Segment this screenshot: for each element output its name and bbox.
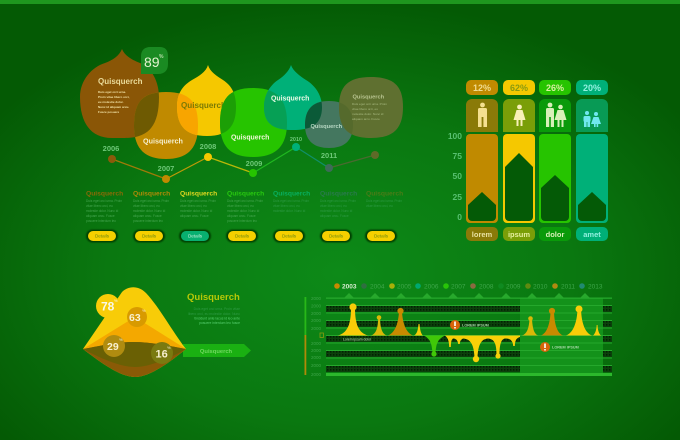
y axis labels: 2000 — [311, 311, 322, 316]
value 78: % — [114, 298, 118, 303]
y axis labels: 2000 — [311, 296, 322, 301]
axis labels: 0 — [457, 212, 462, 222]
column 7: Duis eget orci urna. Proin — [366, 199, 402, 203]
panel: drip timeline — [304, 283, 612, 377]
badge: 89 percent: % — [159, 54, 164, 60]
panel: timeline bubbles — [80, 47, 403, 159]
arrow label — [183, 344, 251, 357]
column 4: Quisquerch — [227, 190, 264, 198]
bubble: 2012: vitae libero orci, eu — [352, 107, 378, 111]
column 2 — [133, 190, 170, 223]
column: ipsum: ipsum — [508, 230, 530, 239]
column 2: Duis eget orci urna. Proin — [133, 199, 169, 203]
bubble: 2012: molestie dolor. Nunc id — [352, 112, 384, 116]
bubble: 2006: Duis eget orci urna. — [98, 90, 126, 94]
value 29 — [103, 335, 125, 357]
value 29: 29 — [107, 341, 119, 353]
column: lorem: lorem — [472, 230, 493, 239]
column 4: Duis eget orci urna. Proin — [227, 199, 263, 203]
buttons: Details — [235, 234, 250, 239]
line chart: years: 2009 — [246, 159, 262, 168]
bubble: 2010 — [264, 65, 322, 130]
legend: 2003 — [342, 284, 357, 290]
bubble: 2012: Quisquerch — [352, 94, 385, 100]
column 5 — [273, 190, 310, 213]
mountain shape — [83, 287, 186, 377]
column: ipsum — [503, 80, 535, 241]
column 1: Quisquerch — [86, 190, 123, 198]
y axis labels: 2000 — [311, 355, 322, 360]
column 2: Quisquerch — [133, 190, 170, 198]
line chart: years: 2011 — [321, 151, 337, 160]
bubble: 2012: Duis eget orci urna. Proin — [352, 102, 387, 106]
legend: 2011 — [561, 284, 575, 290]
column 2: aliquam arcu. Fusce — [133, 214, 162, 218]
column 1: posuere interdum leo — [86, 219, 116, 223]
column 1: Duis eget orci urna. Proin — [86, 199, 122, 203]
downward drips — [424, 336, 520, 362]
column: amet: 20% — [583, 83, 601, 93]
legend: 2005 — [397, 284, 412, 290]
bubble: 2007 — [134, 92, 198, 159]
legend: 2009 — [506, 284, 521, 290]
column: lorem: 12% — [473, 83, 491, 93]
title and text: posuere interdum leo fusce — [199, 321, 240, 325]
value 78 — [96, 294, 120, 318]
bubble: 2011: Quisquerch — [310, 124, 343, 130]
badge: 89 percent — [141, 47, 168, 74]
column 7: Quisquerch — [366, 190, 403, 198]
column 4: posuere interdum leo — [227, 219, 257, 223]
line chart: years: 2008 — [200, 142, 216, 151]
legend — [334, 283, 603, 290]
column 4: aliquam arcu. Fusce — [227, 214, 256, 218]
y axis labels: 2000 — [311, 318, 322, 323]
bubble: 2006: eu molestie dolor. — [98, 100, 124, 104]
legend: 2013 — [588, 284, 603, 290]
legend: 2007 — [451, 284, 466, 290]
value 63: % — [142, 308, 146, 313]
column: amet: amet — [583, 230, 601, 239]
column 6: Quisquerch — [320, 190, 357, 198]
left axis bar — [304, 297, 306, 375]
column 2: molestie dolor. Nunc id — [133, 209, 165, 213]
value 16: 16 — [156, 348, 168, 360]
bubble: 2011 — [305, 101, 352, 148]
column 5: vitae libero orci, eu — [273, 204, 300, 208]
axis labels: 75 — [453, 151, 462, 161]
legend: 2006 — [424, 284, 439, 290]
column: ipsum: 62% — [510, 83, 528, 93]
text columns with buttons — [86, 190, 403, 242]
bubble: 2008: Quisquerch — [181, 101, 226, 110]
column 5: molestie dolor. Nunc id — [273, 209, 305, 213]
column 4 — [227, 190, 264, 223]
line chart: years: 2007 — [158, 164, 174, 173]
title and text — [187, 292, 240, 325]
bubble: 2012: aliquam arcu. Fusce — [352, 117, 380, 121]
column 6: molestie dolor. Nunc id — [320, 209, 352, 213]
column 3: molestie dolor. Nunc id — [180, 209, 212, 213]
line chart: years — [103, 137, 379, 183]
y axis labels: 2000 — [311, 363, 322, 368]
buttons: Details — [282, 234, 297, 239]
bubble: 2006: Nunc id aliquam arcu. — [98, 105, 129, 109]
column 6: vitae libero orci, eu — [320, 204, 347, 208]
upward peaks — [338, 303, 601, 336]
column 1: aliquam arcu. Fusce — [86, 214, 115, 218]
y axis labels — [311, 296, 323, 377]
bubble: 2006: Quisquerch — [98, 77, 143, 86]
y axis labels: 2000 — [311, 326, 322, 331]
buttons — [86, 230, 397, 242]
y axis labels: 2000 — [311, 372, 322, 377]
column 2: vitae libero orci, eu — [133, 204, 160, 208]
value 16: % — [167, 345, 171, 350]
axis labels — [448, 131, 462, 222]
small note: Lorem ipsum dolor — [343, 338, 372, 342]
column: dolor: dolor — [546, 230, 564, 239]
bubble: 2006: Fusce posuere — [98, 110, 120, 114]
y axis labels: 2000 — [311, 341, 322, 346]
legend: 2010 — [533, 284, 548, 290]
title and text: Quisquerch — [187, 292, 240, 303]
callout 2 — [540, 342, 579, 352]
column 5: Duis eget orci urna. Proin — [273, 199, 309, 203]
bubble: 2012 — [339, 77, 403, 138]
column 1: vitae libero orci, eu — [86, 204, 113, 208]
panel: mountain chart — [83, 287, 251, 377]
title and text: Duis eget orci urna. Proin vitae — [194, 307, 240, 311]
callout 1 — [450, 320, 489, 330]
column 5: Quisquerch — [273, 190, 310, 198]
bubble: 2006: Proin vitae libero orci, — [98, 95, 130, 99]
buttons: Details — [95, 234, 110, 239]
axis labels: 50 — [453, 171, 462, 181]
column 6 — [320, 190, 357, 218]
axis labels: 100 — [448, 131, 462, 141]
column 7 — [366, 190, 403, 208]
column 1 — [86, 190, 123, 223]
y axis labels: 2000 — [311, 304, 322, 308]
grid — [326, 293, 612, 376]
buttons: Details — [329, 234, 344, 239]
value 29: % — [119, 337, 123, 342]
column 3: aliquam arcu. Fusce — [180, 214, 209, 218]
bubble: 2008 — [177, 65, 234, 136]
bubble: 2007: Quisquerch — [143, 136, 183, 146]
value 63 — [127, 307, 147, 327]
buttons: Details — [188, 234, 203, 239]
column 3: Quisquerch — [180, 190, 217, 198]
arrow label: Quisquerch — [200, 349, 233, 355]
column: amet — [576, 80, 608, 241]
column 7: vitae libero orci, eu — [366, 204, 393, 208]
bubble: 2009 — [220, 88, 287, 157]
legend: 2004 — [370, 284, 385, 290]
value 16 — [151, 342, 173, 364]
bubble: 2010: Quisquerch — [271, 96, 309, 102]
title and text: tincidunt ante lacus id leo ante — [194, 316, 240, 320]
column 3 — [180, 190, 217, 218]
bubble: 2009: Quisquerch — [231, 134, 269, 142]
axis labels: 25 — [453, 192, 462, 202]
legend: 2008 — [479, 284, 494, 290]
value 78: 78 — [101, 300, 115, 314]
callout 1: LOREM IPSUM — [462, 324, 489, 328]
buttons: Details — [374, 234, 389, 239]
column: lorem — [466, 80, 498, 241]
column 6: aliquam arcu. Fusce — [320, 214, 349, 218]
panel: people bars — [448, 80, 608, 241]
line chart: years: 2006 — [103, 144, 119, 153]
value 63: 63 — [129, 312, 141, 324]
column 3: Duis eget orci urna. Proin — [180, 199, 216, 203]
column 4: vitae libero orci, eu — [227, 204, 254, 208]
buttons: Details — [142, 234, 157, 239]
column: dolor — [539, 80, 571, 241]
badge: 89 percent: 89 — [144, 54, 160, 70]
line chart: years: 2010 — [290, 137, 302, 143]
column 1: molestie dolor. Nunc id — [86, 209, 118, 213]
y axis labels: 2000 — [311, 348, 322, 353]
column 3: vitae libero orci, eu — [180, 204, 207, 208]
bubble: 2006 — [80, 49, 159, 138]
title and text: libero orci, eu molestie dolor. Nunc — [188, 312, 240, 316]
column 2: posuere interdum leo — [133, 219, 163, 223]
column 4: molestie dolor. Nunc id — [227, 209, 259, 213]
callout 2: LOREM IPSUM — [552, 346, 579, 350]
column: dolor: 26% — [546, 83, 564, 93]
column 6: Duis eget orci urna. Proin — [320, 199, 356, 203]
